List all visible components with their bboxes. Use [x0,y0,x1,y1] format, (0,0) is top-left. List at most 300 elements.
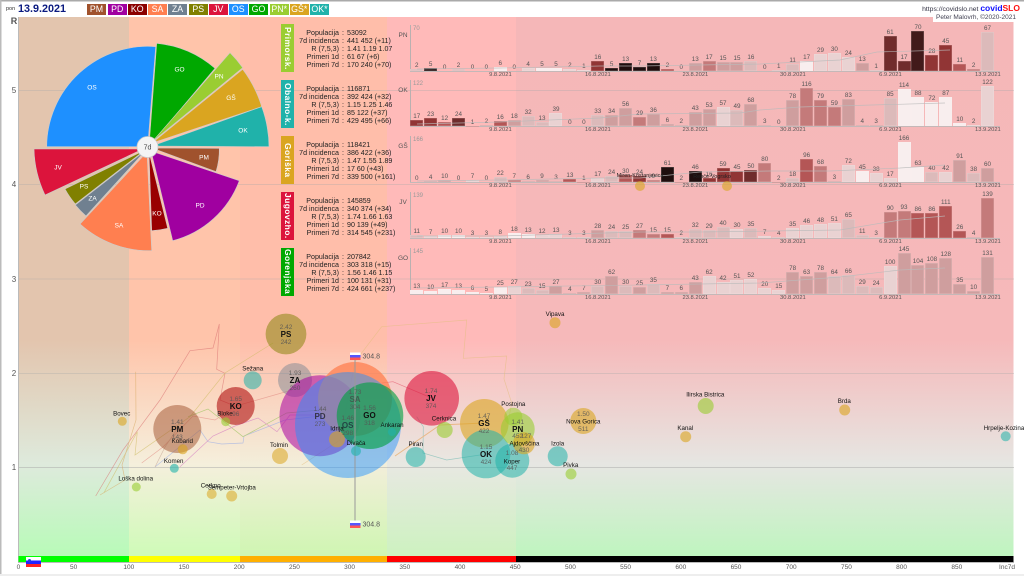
bar chart: GŠ daily cases: 166 [413,137,423,143]
region tag: Gorenjska: Gorenjska [283,249,293,295]
bar chart: GO daily cases: 24 [873,280,880,287]
bar chart: GŠ daily cases: 40 [928,165,935,172]
bar chart: JV daily cases: 7 [429,229,432,236]
bar chart: GO daily cases: 43 [692,275,699,282]
bar chart: PN daily cases: 2 [415,62,419,69]
bar chart: OK daily cases: 57 [720,100,727,107]
municipality names: Piran [408,441,423,448]
bar chart: GO daily cases: 27 [511,279,518,286]
bar chart: JV daily cases: 8 [499,229,502,236]
x axis labels: 700 [786,564,797,571]
wedge: ZA [75,150,146,216]
bar chart: OK daily cases: 0 [777,119,780,126]
bar chart: PN daily cases: 16 [747,54,754,61]
bubble party names: JV [426,394,437,403]
bar chart: OK daily cases: 85 [887,91,894,98]
bar chart: GO daily cases: 6 [471,285,474,292]
bar chart: OK daily cases: 17 [413,113,420,120]
x axis labels: 450 [510,564,521,571]
bar chart: GŠ daily cases: 2 [680,175,683,182]
wedge: OS [47,46,156,147]
x axis labels: 50 [70,564,78,571]
reference line with flags: Slovenia 304.8: 304.8 [362,522,380,528]
stats: Jugovzho.: : [342,197,344,205]
bar chart: JV daily cases: 4 [777,230,780,237]
bar chart: OK daily cases: 83 [845,92,852,99]
municipality names: Izola [551,440,565,448]
bar chart: OK daily cases: 16 [497,114,504,121]
stats: Gorenjska: Populacija [306,253,339,261]
pie center: 7d: 7d [144,144,151,152]
stats: Obalno-k.: : [342,101,344,109]
reference line with flags: Slovenia 304.8 [350,352,380,528]
bar chart: GŠ daily cases: 9 [652,173,655,180]
bar chart: JV daily cases: 46 [803,218,810,225]
stats: Jugovzho.: : [342,229,344,237]
bar chart: GO daily cases: 35 [650,277,657,284]
bubble value labels: 1.15 [480,444,493,451]
municipality names: Brda [838,398,851,405]
bar chart: GŠ daily cases: 24 [608,169,615,176]
bar chart: GŠ daily cases: 61 [664,160,671,167]
stats: Primorsk.: : [342,61,344,69]
small overlaid municipality markers: Renče-Vogrsko [693,174,731,180]
stats: Goriška: : [342,141,344,149]
stats: Primorsk.: 441 452 (+11) [347,37,391,45]
bubble value labels: 242 [281,339,292,346]
wedge: JV [34,149,143,195]
stats: Goriška: : [342,149,344,157]
bar chart: GŠ daily cases: 1 [582,175,586,182]
bar chart: OK daily cases: OK [398,87,408,94]
bar chart: GO daily cases: 62 [706,269,713,276]
wedge: KO: KO [152,210,162,218]
bubble value labels: 1.50 [577,411,590,418]
bar chart: PN daily cases: 0 [471,64,474,70]
x axis labels: 0 [17,564,21,571]
bar chart: GO daily cases: 15 [539,283,546,290]
bar chart: GŠ daily cases: 17 [594,171,601,178]
stats: Jugovzho.: 314 545 (+231) [347,229,395,237]
bar chart: JV daily cases: 139 [413,193,423,199]
wedge: PM: PM [199,154,209,162]
bar chart: JV daily cases: 7 [763,229,767,236]
stats: Primorsk.: : [342,45,344,53]
legend chips: JV [213,4,223,14]
trend lines and overlaid bubbles on bar charts [417,50,950,288]
bar chart: GO daily cases: 108 [927,256,937,263]
bar chart: PN daily cases: 4 [526,61,530,68]
bar chart: JV daily cases: 139 [982,191,993,198]
stats: Goriška: Primeri 1d [307,165,339,173]
bar chart: OK daily cases: 88 [914,90,921,97]
bar chart: GŠ daily cases: 42 [942,165,949,172]
stats: Obalno-k.: : [342,117,344,125]
stats: Obalno-k.: 85 122 (+37) [347,109,387,117]
bubble value labels: 2.42 [280,324,293,331]
legend chips: OK* [311,4,328,14]
bar chart: JV daily cases: 3 [471,230,474,237]
bar chart: JV daily cases: 32 [692,222,699,229]
bar chart: OK daily cases: 12 [441,115,448,122]
bar chart: JV daily cases: 29 [706,223,713,230]
bar chart: JV daily cases: 15 [650,227,657,234]
trajectory lines [96,320,512,496]
stats: Obalno-k.: 116871 [347,85,370,93]
stats: Obalno-k.: : [342,109,344,117]
municipality names: Divača [347,440,366,447]
wedge: GO: GO [174,66,185,74]
bar chart: PN daily cases: 0 [763,64,767,70]
bar chart: PN daily cases: 5 [610,61,613,68]
bar chart: PN daily cases: 2 [666,62,669,69]
wedge: GŠ: GŠ [226,93,236,102]
municipality names: Loška dolina [118,476,154,482]
bar chart: GŠ daily cases: 9.8.2021 [489,183,512,189]
bar chart: JV daily cases: 9.8.2021 [489,239,512,245]
stats: Primorsk.: 53092 [347,29,367,37]
bar chart: OK daily cases [398,79,1001,133]
municipality names: Hrpelje-Kozina [984,425,1024,432]
bar chart: JV daily cases: 3 [485,230,488,237]
x axis labels: 300 [344,564,355,571]
x axis labels: 650 [731,564,742,571]
bar chart: GŠ daily cases: 16 [706,171,713,178]
bar chart: PN daily cases: 13.9.2021 [975,72,1001,78]
stats: Goriška: 118421 [347,141,370,149]
wedge: GO [149,43,215,147]
bar chart: OK daily cases: 9.8.2021 [489,127,512,133]
bubble party names: SA [349,395,361,404]
bar chart: JV daily cases: 30.8.2021 [780,239,806,245]
bar chart: GŠ daily cases: 91 [956,153,963,160]
bar chart: GŠ daily cases: 18 [789,171,796,178]
wedge: OK: OK [238,128,248,134]
region tag: Goriška: Goriška [283,143,293,177]
wedge: ZA: ZA [88,196,97,202]
bar chart: PN daily cases: 70 [914,24,921,31]
wedge: GŠ [152,69,262,143]
bar chart: OK daily cases: 29 [636,110,643,116]
stats: Gorenjska: : [342,261,344,269]
bubble value labels: 452 [512,433,524,440]
bubble value labels [171,324,590,472]
stats: Jugovzho.: : [342,213,344,221]
stats: Gorenjska: 207842 [347,253,371,261]
stats: Goriška: : [342,173,344,181]
stats: Gorenjska: : [342,253,344,261]
municipality names: Pivka [563,462,579,469]
bar chart: GŠ daily cases: 30.8.2021 [780,183,806,189]
bar chart: GŠ daily cases: 22 [497,170,504,177]
bubble value labels: 374 [426,403,437,410]
bar chart: JV daily cases: 10 [455,228,462,235]
wedge: OK [152,107,269,147]
legend chips: PD [111,4,123,14]
bar chart: OK daily cases: 2 [485,118,488,125]
bar chart: GO daily cases: 100 [885,259,895,266]
bar chart: GŠ daily cases: 6 [526,174,530,181]
y axis labels: R [11,16,18,26]
bubble value labels: 511 [578,426,589,433]
bar chart: JV daily cases: 40 [720,220,727,226]
wedge: SA [80,152,152,251]
bubble party names: GO [363,411,376,420]
bar chart: JV daily cases: 18 [511,226,518,233]
bar chart: GO daily cases: 66 [845,268,852,275]
stats: Gorenjska [299,253,395,293]
bar chart: OK daily cases: 30.8.2021 [780,127,806,133]
bar chart: GO daily cases: 30 [594,279,601,286]
x axis labels: 600 [675,564,687,571]
municipality names: Ankaran [380,422,404,429]
bar chart: PN daily cases: 5 [540,61,544,68]
stats: Jugovzho.: 145859 [347,197,371,205]
bar chart: OK daily cases: 16.8.2021 [585,127,611,133]
bar chart: JV daily cases: 16.8.2021 [585,239,611,245]
bubble party names: GŠ [478,419,490,428]
bar chart: OK daily cases: 23 [427,111,434,118]
stats: Gorenjska: 303 318 (+15) [347,261,391,269]
bubble value labels: 422 [479,428,490,435]
stats: Goriška: 339 500 (+161) [347,173,395,181]
bubble party names [171,330,523,459]
bar chart: PN daily cases: PN [398,32,408,38]
bubble value labels: 1.46 [341,415,354,422]
municipality names: Sežana [242,366,264,372]
stats: Gorenjska: Primeri 1d [307,277,339,285]
bar chart: GŠ daily cases: 7 [471,173,474,180]
y axis labels: 3 [12,275,17,284]
bar chart: GO daily cases: 6.9.2021 [879,295,902,301]
stats: Jugovzho.: 1.74 1.66 1.63 [347,213,392,221]
x axis labels: 800 [896,564,907,571]
wedge: PD [151,151,239,241]
bar chart: OK daily cases: 6.9.2021 [879,127,902,133]
bar chart: GO daily cases: 16.8.2021 [585,295,611,301]
bar chart: JV daily cases: 30 [733,222,740,229]
bar chart: GŠ daily cases: 0 [457,175,460,182]
bar chart: JV daily cases: 51 [831,216,838,223]
pie center: 7d [137,136,158,158]
bar chart: JV daily cases: 27 [636,223,643,230]
bubble party names: PM [171,425,184,434]
bar chart: JV daily cases: 86 [928,206,935,213]
municipality names: Bovec [113,410,130,418]
bar chart: PN daily cases: 17 [803,54,810,61]
bar chart: OK daily cases: 2 [680,118,683,125]
stats: Gorenjska: : [342,285,344,293]
legend chips: SA [152,4,163,14]
bar chart: PN daily cases: 15 [720,55,727,62]
stats: Gorenjska: : [342,269,344,277]
bubble party names: ZA [290,376,301,385]
bar chart: JV daily cases [399,191,1001,245]
bar chart: PN daily cases: 30.8.2021 [780,72,806,78]
bar chart: JV daily cases: 13 [525,227,532,234]
bar chart: GO daily cases: 4 [568,286,572,293]
y axis labels: 2 [12,369,17,378]
bar chart: PN daily cases: 16 [594,54,601,61]
stats: Primorsk.: 7d incidenca [299,37,339,45]
stats: Obalno-k.: 429 495 (+66) [347,117,391,125]
bar chart: PN daily cases: 28 [928,48,935,55]
bar chart: GO daily cases: 78 [789,265,796,272]
municipality names: Cerkno [201,482,221,490]
bar chart: OK daily cases: 13 [539,115,546,122]
wedge: PD: PD [195,202,205,210]
stats: Primorsk.: 61 67 (+6) [347,53,380,61]
wedge: PS: PS [80,184,89,190]
bar chart: PN daily cases: 2 [972,62,975,69]
wedge: OS: OS [87,84,97,92]
bar chart: GŠ daily cases: 4 [429,174,432,181]
bubble value labels: 1.73 [349,389,362,396]
bubble party names: PN [512,425,523,434]
bubble value labels: 447 [507,465,518,472]
region tag: Obalno-k.: Obalno-k. [283,83,293,125]
x axis labels: 550 [620,564,631,571]
bar chart: GO daily cases: 131 [982,250,993,257]
bar chart: GŠ daily cases: 13 [566,172,573,179]
bubble value labels: 1.93 [289,370,302,377]
bar chart: GO daily cases: 9.8.2021 [489,295,512,301]
bar chart: JV daily cases: 3 [568,230,572,237]
bar chart: JV daily cases: 35 [747,221,754,228]
bar chart: OK daily cases: 18 [511,113,518,120]
bar chart: OK daily cases: 3 [874,118,878,125]
stats: Jugovzho.: 340 374 (+34) [347,205,391,213]
bar chart: PN daily cases: 17 [901,54,908,61]
bar chart: OK daily cases: 3 [763,118,767,125]
stats: Gorenjska: 424 661 (+237) [347,285,395,293]
bar chart: GŠ daily cases: 9 [540,173,544,180]
bubble value labels: 304 [350,404,361,411]
bar chart: JV daily cases: 26 [956,224,963,231]
bar chart: GO daily cases: 10 [970,284,977,291]
bar chart: GO daily cases: 17 [441,282,448,289]
bar chart: PN daily cases: 0 [443,64,446,70]
bar chart: GŠ daily cases: 24 [636,169,643,176]
wedge: PM [152,148,219,172]
bar chart: GŠ daily cases: 68 [817,159,824,166]
x axis labels: 250 [289,564,300,571]
bar chart: GŠ daily cases [398,135,1001,189]
wedge: PS [65,150,145,204]
bar chart: JV daily cases: 111 [941,199,951,206]
bar chart: OK daily cases: 6 [666,117,669,124]
stats: Jugovzho.: 7d incidenca [299,205,339,213]
icon: Slovenian flag on axis [26,557,41,567]
stats: Primorsk.: Primeri 1d [307,53,339,61]
bar chart: PN daily cases: 17 [706,54,713,61]
municipality names: Postojna [501,401,526,408]
stats: Primorsk.: Primeri 7d [307,61,339,69]
bar chart: GŠ daily cases: 96 [803,152,810,159]
bar chart: OK daily cases: 122 [413,81,423,87]
bar chart: OK daily cases: 32 [525,109,532,116]
bar chart: GŠ daily cases: 59 [720,161,727,168]
bar chart: OK daily cases: 78 [789,93,796,100]
bar chart: JV daily cases: 24 [608,224,615,231]
bar chart: GŠ daily cases: 45 [733,164,740,171]
x axis labels: Inc7d [999,564,1015,571]
bar chart: GŠ daily cases: 38 [970,166,977,173]
stats: Obalno-k.: 392 424 (+32) [347,93,391,101]
bubble value labels: 260 [290,385,301,392]
reference line with flags: Slovenia 304.8: 304.8 [362,354,380,360]
legend chips: GO [252,4,265,14]
header strip [2,2,1024,17]
stats: Obalno-k.: Primeri 1d [307,109,339,117]
bar chart: OK daily cases: 23.8.2021 [682,127,708,133]
region tag: Primorsk.: Primorsk. [283,27,293,69]
bar chart: GŠ daily cases: 166 [899,135,909,142]
stats: Primorsk.: R (7,5,3) [311,45,339,53]
bar chart: JV daily cases: 86 [914,206,921,213]
bar chart: GŠ daily cases: 46 [692,164,699,171]
region tag: Obalno-k. [281,80,294,128]
bar chart: PN daily cases: 0 [512,64,516,70]
stats: Jugovzho.: Primeri 7d [307,229,339,237]
bar chart: GŠ daily cases: 80 [761,156,768,163]
bar chart: JV daily cases: 65 [845,212,852,219]
municipality names: Nova Gorica [566,418,601,426]
bubble value labels: 424 [481,459,492,466]
stats: Goriška: R (7,5,3) [311,157,339,165]
site credit: https://covidslo.net covidSLO [922,3,1020,13]
bar chart: GŠ daily cases: 50 [747,163,754,170]
bar chart: GO daily cases: 5 [485,286,488,293]
bar chart: GO daily cases: 145 [413,249,423,255]
bar chart: GO daily cases: 20 [761,281,768,288]
x axis labels: 150 [179,564,190,571]
stats: Goriška: 7d incidenca [299,149,339,157]
bar chart: PN daily cases: 13 [622,56,629,63]
stats: Goriška: 1.47 1.55 1.89 [347,157,392,165]
bar chart: GO daily cases: 13 [413,283,420,290]
bar chart: OK daily cases: 10 [956,116,963,123]
date: 13.9.2021 [18,3,66,15]
bar chart: PN daily cases: 13 [650,56,657,63]
stats: Jugovzho.: R (7,5,3) [311,213,339,221]
bar chart: GŠ daily cases: 3 [554,174,558,181]
municipality names: Cerknica [432,416,457,422]
bubble value labels: 1.08 [506,450,519,457]
bar chart: PN daily cases: 9.8.2021 [489,72,512,78]
bar chart: JV daily cases: 90 [887,205,894,212]
legend chips: PM [90,4,103,14]
x axis labels: 350 [399,564,411,571]
bubble value labels: 96 [232,411,240,418]
x axis labels [17,564,1015,571]
bubble party names: KO [230,402,242,411]
bar chart: GO daily cases: 128 [941,251,951,258]
bar chart: JV daily cases: JV [399,199,407,206]
x axis labels: 500 [565,564,576,571]
x axis labels: 100 [123,564,135,571]
bar chart: GO daily cases: 23.8.2021 [682,295,708,301]
stats: Obalno-k.: R (7,5,3) [311,101,339,109]
bar chart: GO daily cases: 64 [831,269,838,276]
stats: Primorsk.: : [342,29,344,37]
wedge: JV: JV [54,164,62,172]
bubble value labels: 1.65 [229,396,242,403]
stats: Primorsk.: 1.41 1.19 1.07 [347,45,392,53]
bar chart: JV daily cases: 3 [874,230,878,237]
stats: Obalno-k.: Populacija [306,85,339,93]
stats: Goriška: 17 60 (+43) [347,165,383,173]
